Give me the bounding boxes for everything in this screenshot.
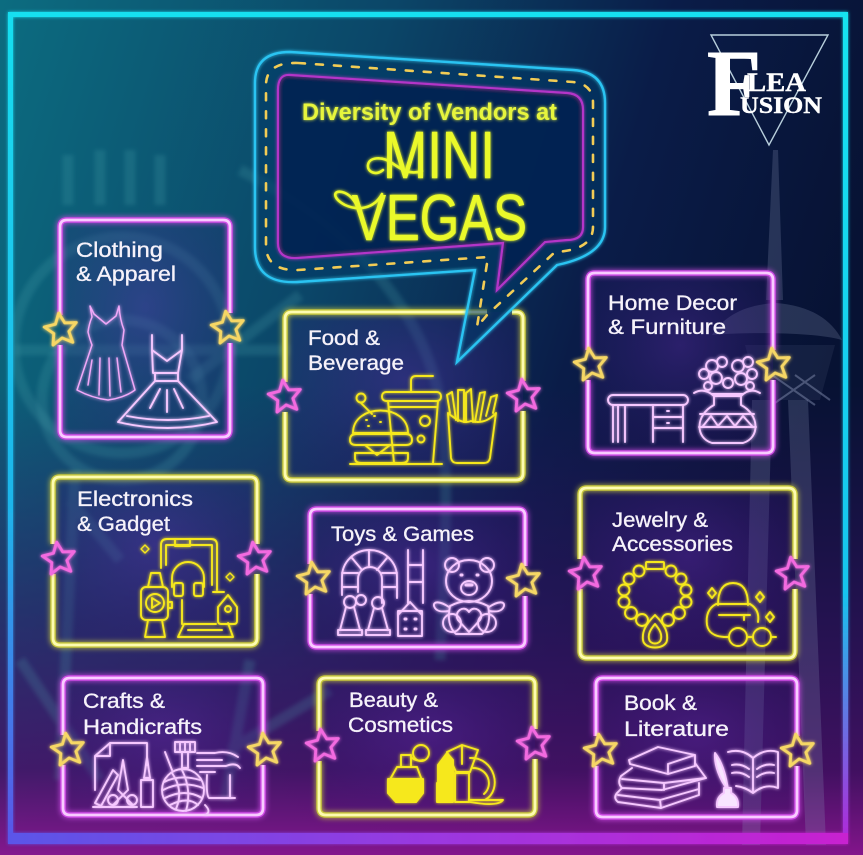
icon: star right (237, 540, 273, 575)
heading: home decor (608, 292, 737, 339)
icon: star left (267, 378, 303, 413)
icon: dresses (77, 306, 217, 428)
icon: star right (756, 346, 792, 381)
speech bubble title (255, 52, 605, 362)
icon: star left (573, 346, 609, 381)
heading: food: Beverage (308, 352, 404, 375)
icon: star right (516, 725, 552, 760)
heading: crafts: Handicrafts (83, 716, 202, 739)
panel: home decor and furniture (573, 273, 792, 453)
heading: clothing (76, 239, 176, 286)
icon: star right (506, 377, 542, 412)
heading: beauty (348, 689, 453, 737)
heading: book: Book & (624, 692, 697, 715)
panel: crafts and handicrafts (50, 678, 283, 815)
panel: toys and games (296, 509, 542, 647)
heading: book (624, 692, 729, 741)
heading: home decor: & Furniture (608, 316, 726, 339)
panel: electronics and gadget (41, 477, 273, 645)
icon: star right (247, 731, 283, 766)
icon: perfume, lipstick, brush and compact (388, 745, 503, 804)
heading: jewelry: Jewelry & (612, 509, 708, 532)
title: vegas: VEGAS (352, 181, 527, 254)
icon: star left (43, 311, 79, 346)
heading: electronics: Electronics (77, 488, 193, 511)
panel: beauty and cosmetics (305, 678, 552, 815)
panel: clothing and apparel (43, 220, 246, 437)
icon: books, quill and open book (615, 747, 778, 808)
heading: electronics: & Gadget (77, 513, 170, 536)
icon: gadgets (141, 539, 237, 637)
icon: star left (305, 727, 341, 762)
icon: star left (50, 731, 86, 766)
icon: star left (568, 555, 604, 590)
panel: book and literature (583, 678, 816, 817)
icon: star left (296, 560, 332, 595)
icon: board game and teddy bear (338, 550, 504, 636)
icon: desk and flower vase (608, 357, 760, 443)
heading: crafts (83, 690, 202, 739)
heading: food (308, 327, 404, 375)
heading: jewelry: Accessories (612, 533, 733, 556)
logo: Flea Fusion (707, 32, 828, 145)
background decoration: space needle tower (712, 150, 842, 845)
heading: toys: Toys & Games (331, 523, 474, 546)
panel: food and beverage (267, 312, 542, 480)
icon: star right (775, 555, 811, 590)
heading: clothing: Clothing (76, 239, 163, 262)
heading: clothing: & Apparel (76, 263, 176, 286)
title line: Diversity of Vendors at (302, 99, 557, 126)
icon: star left (583, 732, 619, 767)
icon: star right (210, 309, 246, 344)
icon: star right (506, 562, 542, 597)
heading: jewelry (612, 509, 733, 556)
heading: home decor: Home Decor (608, 292, 737, 315)
panel: jewelry and accessories (568, 488, 811, 658)
heading: electronics (77, 488, 193, 536)
icon: star left (41, 540, 77, 575)
icon: burger, drink and fries (350, 376, 497, 464)
logo: Flea Fusion: USION (740, 93, 822, 118)
icon: craft supplies and yarn (93, 742, 240, 815)
background decoration: circular emblem (14, 150, 446, 800)
icon: necklace, bag and glasses (618, 562, 776, 648)
heading: book: Literature (624, 718, 729, 741)
heading: beauty: Beauty & (349, 689, 438, 712)
heading: beauty: Cosmetics (348, 714, 453, 737)
title: mini: MINI (383, 118, 495, 193)
heading: crafts: Crafts & (83, 690, 165, 713)
logo: Flea Fusion: LEA (747, 68, 806, 97)
heading: food: Food & (308, 327, 380, 350)
icon: star right (780, 732, 816, 767)
logo: Flea Fusion: F (707, 32, 761, 136)
